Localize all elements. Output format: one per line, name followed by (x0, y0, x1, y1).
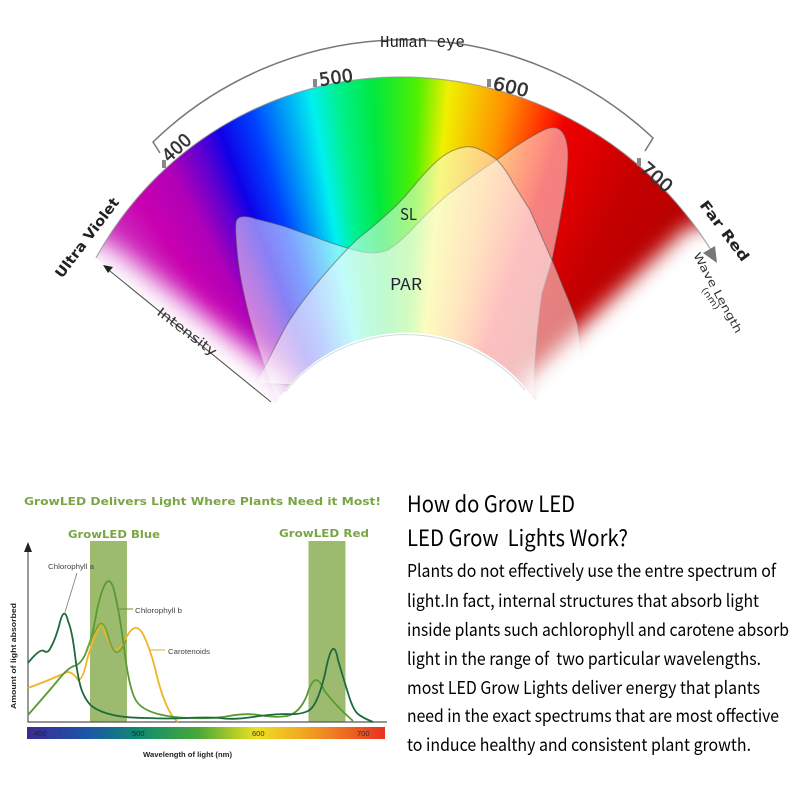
label: Intensity: Intensity (154, 305, 220, 360)
callout: Chlorophyll b (118, 606, 182, 615)
label: SL: SL (400, 201, 417, 225)
right white fade (521, 215, 780, 480)
heading line 2: LED Grow Lights Work? (407, 521, 628, 553)
heading: GrowLED Red: GrowLED Red (279, 528, 369, 540)
curve: bell spectrum (257, 147, 580, 400)
label: PAR: PAR (390, 271, 422, 295)
spectrum scale bar: 400 (34, 729, 47, 738)
tick 700: 700 (636, 158, 677, 197)
chlorophyll a curve (28, 614, 373, 722)
body line 5: most LED Grow Lights deliver energy that plants (407, 675, 760, 700)
spectrum scale bar: 600 (252, 729, 265, 738)
panel: rainbow spectrum fan (96, 77, 705, 404)
chart: light absorption by pigment (11, 495, 387, 759)
label: Human eye: Human eye (380, 34, 465, 53)
intensity axis arrow (103, 265, 271, 402)
heading line 1: How do Grow LED (407, 487, 575, 519)
callout: Carotenoids: Carotenoids (168, 647, 210, 656)
SL and PAR translucent curves (236, 128, 580, 400)
label: Wave Length: Wave Length (690, 250, 745, 336)
left white fade (40, 230, 296, 480)
red band (308, 541, 346, 722)
tick 400: 400 (158, 130, 196, 167)
spectrum scale bar: 700 (357, 729, 370, 738)
bracket: human eye range (153, 40, 653, 153)
spectrum scale bar: 500 (132, 729, 145, 738)
curve: double-peak spectrum (236, 128, 568, 400)
body line 2: light.In fact, internal structures that absorb light (407, 588, 759, 613)
tick 600: 600 (491, 73, 531, 102)
secondary green curve (85, 623, 126, 655)
body line 7: to induce healthy and consistent plant growth. (407, 732, 751, 757)
callout: Chlorophyll b: Chlorophyll b (135, 606, 182, 615)
x axis label: Wavelength of light (nm) (143, 752, 232, 759)
y axis label: Amount of light absorbed (11, 603, 18, 709)
callout: Carotenoids (150, 647, 210, 656)
text block: how grow lights work (407, 487, 789, 757)
label: Far Red: Far Red (696, 198, 752, 265)
heading: GrowLED Blue: GrowLED Blue (68, 529, 160, 541)
axes (24, 542, 387, 722)
callout: Chlorophyll a: Chlorophyll a (48, 562, 95, 571)
body line 4: light in the range of two particular wavelengths. (407, 646, 761, 671)
inner hole edge (285, 335, 525, 392)
label: nm unit: (nm) (699, 286, 721, 312)
spectrum scale bar (27, 727, 385, 739)
label: Ultra Violet: Ultra Violet (52, 195, 123, 281)
chart title: GrowLED Delivers Light Where Plants Need it Most! (24, 495, 381, 508)
tick 500: 500 (318, 65, 354, 91)
callout: Chlorophyll a (48, 562, 95, 612)
blue band (90, 541, 127, 722)
chlorophyll b curve (28, 581, 353, 721)
outer edge line with wavelength arrow (96, 77, 717, 263)
carotenoids curve (28, 623, 178, 722)
